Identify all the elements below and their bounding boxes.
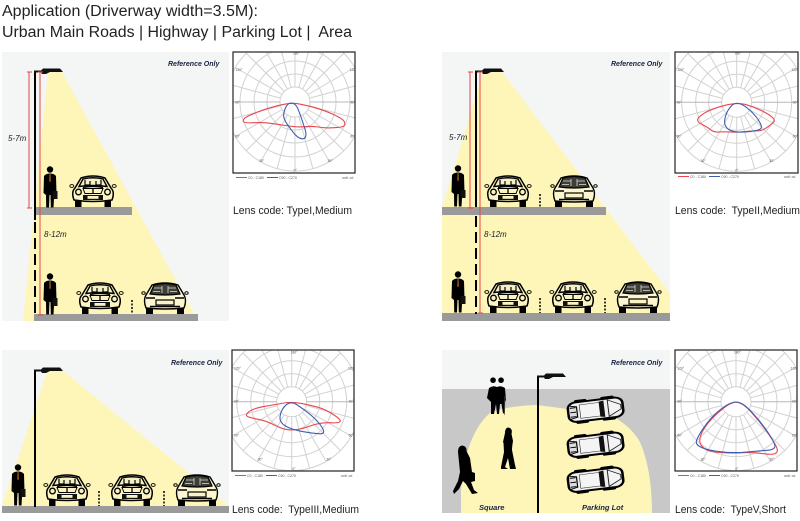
polar chart: type II: 60° [793, 135, 798, 139]
polar chart: type V: 120° [677, 367, 685, 371]
light beam [23, 72, 198, 321]
polar chart: type I [226, 33, 364, 180]
polar chart: type I: 60° [350, 135, 356, 139]
gray ground [442, 389, 670, 513]
label 8-12m: 8-12m [484, 230, 507, 239]
street pole [34, 370, 36, 507]
polar chart: type V: 60° [677, 433, 683, 437]
panel: type V area illustration [442, 350, 670, 513]
polar chart: type III: C0 - C180 [247, 474, 263, 478]
polar chart: type V: unit: cd [784, 474, 795, 478]
polar chart: type I: 90° [350, 100, 356, 104]
polar chart: type II: 180° [735, 52, 742, 56]
car upper [485, 176, 531, 207]
parked car 1 [567, 394, 624, 425]
car lower 2 [550, 282, 596, 313]
man walking with bag [453, 446, 478, 494]
panel: type III road illustration [2, 350, 229, 513]
person lower [452, 271, 466, 312]
polar chart: type III: 90° [349, 399, 354, 403]
lens code: type III: Lens code: TypeIII,Medium [232, 504, 359, 516]
polar chart: type I: 30° [328, 159, 333, 163]
reference note: Reference Only [611, 61, 663, 68]
parked car 2 [567, 429, 624, 460]
polar chart: type II: 0° [735, 169, 739, 173]
title: Application (Driverway width=3.5M): [2, 3, 258, 20]
rear car [174, 475, 220, 506]
street pole [537, 376, 539, 513]
street pole [34, 72, 36, 220]
height marker 8-12m [478, 72, 483, 313]
elderly couple [487, 377, 506, 414]
polar chart: type I: 60° [235, 135, 241, 139]
street lamp [475, 68, 504, 74]
lane divider lower 2 [604, 298, 606, 313]
person lower [44, 273, 58, 314]
polar chart: type II: 30° [769, 159, 775, 163]
polar chart: type III: 0° [292, 467, 296, 471]
light pool [461, 405, 652, 513]
polar chart: type II: 120° [677, 68, 685, 72]
reference note: Reference Only [168, 61, 220, 68]
polar chart: type III: 60° [349, 433, 354, 437]
lens code: type V: Lens code: TypeV,Short [675, 504, 786, 516]
car lower [77, 283, 123, 314]
rear car lower [615, 282, 661, 313]
polar chart: type III: 180° [291, 350, 298, 354]
light beam [442, 72, 670, 321]
polar chart: type II: 90° [793, 100, 798, 104]
polar chart: type V: 0° [735, 467, 739, 471]
lower road [34, 314, 198, 321]
polar chart: type I: 120° [350, 68, 357, 72]
polar chart: type III: unit: cd [341, 474, 352, 478]
lower road [442, 313, 670, 321]
lane divider lower 1 [539, 298, 541, 313]
polar chart: type V: 60° [792, 433, 798, 437]
parked car 3 [567, 464, 624, 495]
polar chart: type II: 60° [677, 135, 682, 139]
polar chart: type III [223, 333, 361, 478]
polar chart: type V: 90° [792, 399, 798, 403]
title: Urban Main Roads | Highway | Parking Lot | Area [2, 24, 352, 41]
label 8-12m: 8-12m [44, 230, 67, 239]
polar chart: type V: C0 - C180 [690, 474, 706, 478]
polar chart: type V: 90° [677, 399, 683, 403]
polar chart: type II [668, 33, 800, 179]
rear car lower [142, 283, 188, 314]
polar chart: type II: C90 - C270 [721, 175, 739, 179]
reference note: Reference Only [171, 360, 223, 367]
polar chart: type I: 180° [293, 52, 301, 56]
street lamp [34, 68, 63, 74]
polar chart: type II: 90° [677, 100, 682, 104]
polar chart: type III: 30° [258, 458, 263, 462]
polar chart: type V: C90 - C270 [721, 474, 739, 478]
polar chart: type III: 60° [234, 433, 240, 437]
label 5-7m: 5-7m [449, 133, 468, 142]
polar chart: type I: C0 - C180 [248, 176, 264, 180]
polar chart: type III: 120° [348, 367, 356, 371]
polar chart: type V: 120° [791, 367, 798, 371]
polar chart: type III: 120° [234, 367, 242, 371]
polar chart: type III: 30° [326, 458, 332, 462]
polar chart: type III: C90 - C270 [278, 474, 296, 478]
polar chart: type V: 180° [734, 350, 742, 354]
car 2 [109, 475, 155, 506]
car lower 1 [485, 282, 531, 313]
polar chart: type II: 30° [701, 159, 706, 163]
polar chart: type V [667, 333, 800, 478]
car upper [70, 176, 116, 207]
reference note: Reference Only [611, 360, 663, 367]
person upper [44, 166, 58, 208]
car 1 [44, 475, 90, 506]
polar chart: type I: 90° [235, 100, 241, 104]
polar chart: type III: 90° [234, 399, 240, 403]
panel: type I road illustration [2, 52, 229, 321]
street pole [475, 72, 477, 207]
lane divider 1 [98, 491, 100, 506]
polar chart: type I: unit: cd [342, 176, 353, 180]
woman walking [501, 428, 516, 469]
walking stick [504, 396, 506, 415]
polar chart: type I: C90 - C270 [279, 176, 297, 180]
polar chart: type II: 120° [791, 68, 799, 72]
person upper [452, 165, 466, 206]
panel: type II road illustration [442, 52, 670, 321]
person [12, 464, 26, 506]
polar chart: type I: 120° [236, 68, 243, 72]
label parking lot: Parking Lot [582, 503, 624, 512]
lens code: type I: Lens code: TypeI,Medium [233, 205, 352, 217]
upper road [442, 207, 606, 215]
lane divider 2 [163, 491, 165, 506]
polar chart: type I: 0° [294, 169, 298, 173]
height marker 5-7m [27, 72, 32, 208]
street lamp [537, 374, 566, 379]
lane divider upper [539, 194, 541, 207]
rear car upper [551, 176, 597, 207]
height marker 8-12m [38, 72, 43, 315]
label square: Square [479, 503, 504, 512]
title [2, 3, 352, 41]
light beam [2, 370, 229, 506]
height marker 5-7m [468, 72, 473, 208]
polar chart: type II: C0 - C180 [690, 175, 706, 179]
street lamp [34, 368, 63, 373]
polar chart: type I: 30° [259, 159, 265, 163]
road [2, 506, 229, 513]
polar chart: type V: 30° [769, 458, 775, 462]
upper road [35, 207, 132, 215]
polar chart: type V: 30° [701, 458, 706, 462]
polar chart: type II: unit: cd [784, 175, 795, 179]
lane divider [131, 300, 133, 314]
label 5-7m: 5-7m [8, 134, 27, 143]
